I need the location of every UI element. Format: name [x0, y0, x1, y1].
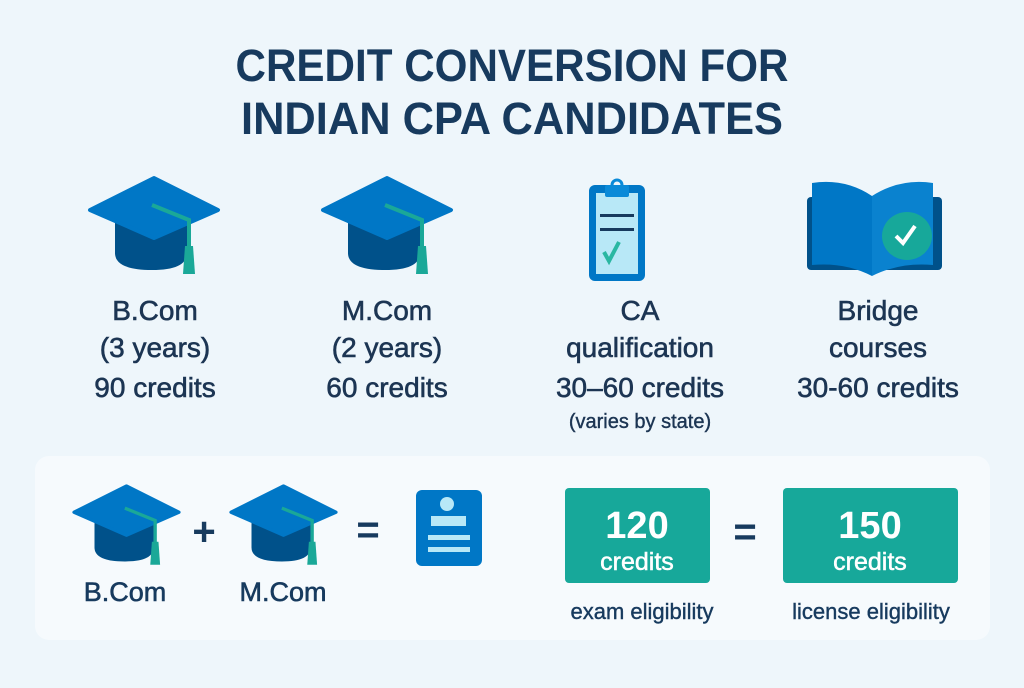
text: M.Com: (2 years): [332, 332, 442, 363]
text: CA: CA: [621, 295, 660, 326]
text: CA: 30–60 credits: [556, 372, 724, 403]
title: [236, 40, 788, 144]
box: 150 credits: [783, 488, 958, 583]
text: Bridge: [797, 295, 959, 403]
title: INDIAN CPA CANDIDATES: [241, 93, 783, 144]
box: 120 credits: credits: [600, 548, 674, 576]
text: M.Com: 60 credits: [326, 372, 448, 403]
text: CA: (varies by state): [569, 411, 711, 433]
plus: +: [192, 510, 216, 554]
panel: summary: [35, 456, 990, 640]
icon: cap 1: [74, 486, 179, 565]
box: 120 credits: [565, 488, 710, 583]
text: Bridge: Bridge: [838, 295, 918, 326]
icon: M.Com cap: [323, 178, 451, 274]
text: B.Com: [94, 295, 216, 403]
icon: clipboard: [589, 180, 645, 281]
labels: M.Com: [240, 577, 326, 607]
text: B.Com: B.Com: [112, 295, 198, 326]
icon: document: [416, 490, 482, 566]
equals: =: [356, 508, 380, 552]
icon: B.Com cap: [90, 178, 218, 274]
text: B.Com: 90 credits: [94, 372, 216, 403]
box: 150 credits: credits: [833, 548, 907, 576]
captions: exam eligibility: [570, 599, 714, 624]
captions: license eligibility: [792, 599, 950, 624]
text: M.Com: M.Com: [342, 295, 432, 326]
box: 150 credits: 150: [838, 505, 902, 547]
text: CA: [556, 295, 724, 433]
icon: cap 2: [231, 486, 336, 565]
text: CA: qualification: [566, 332, 714, 363]
icon: book: [807, 182, 942, 276]
labels: [84, 577, 326, 607]
labels: B.Com: [84, 577, 166, 607]
title: CREDIT CONVERSION FOR: [236, 40, 788, 91]
text: B.Com: (3 years): [100, 332, 210, 363]
captions: [570, 599, 950, 624]
text: M.Com: [326, 295, 448, 403]
equals 2: =: [733, 510, 757, 554]
text: Bridge: 30-60 credits: [797, 372, 959, 403]
text: Bridge: courses: [829, 332, 927, 363]
box: 120 credits: 120: [605, 505, 669, 547]
